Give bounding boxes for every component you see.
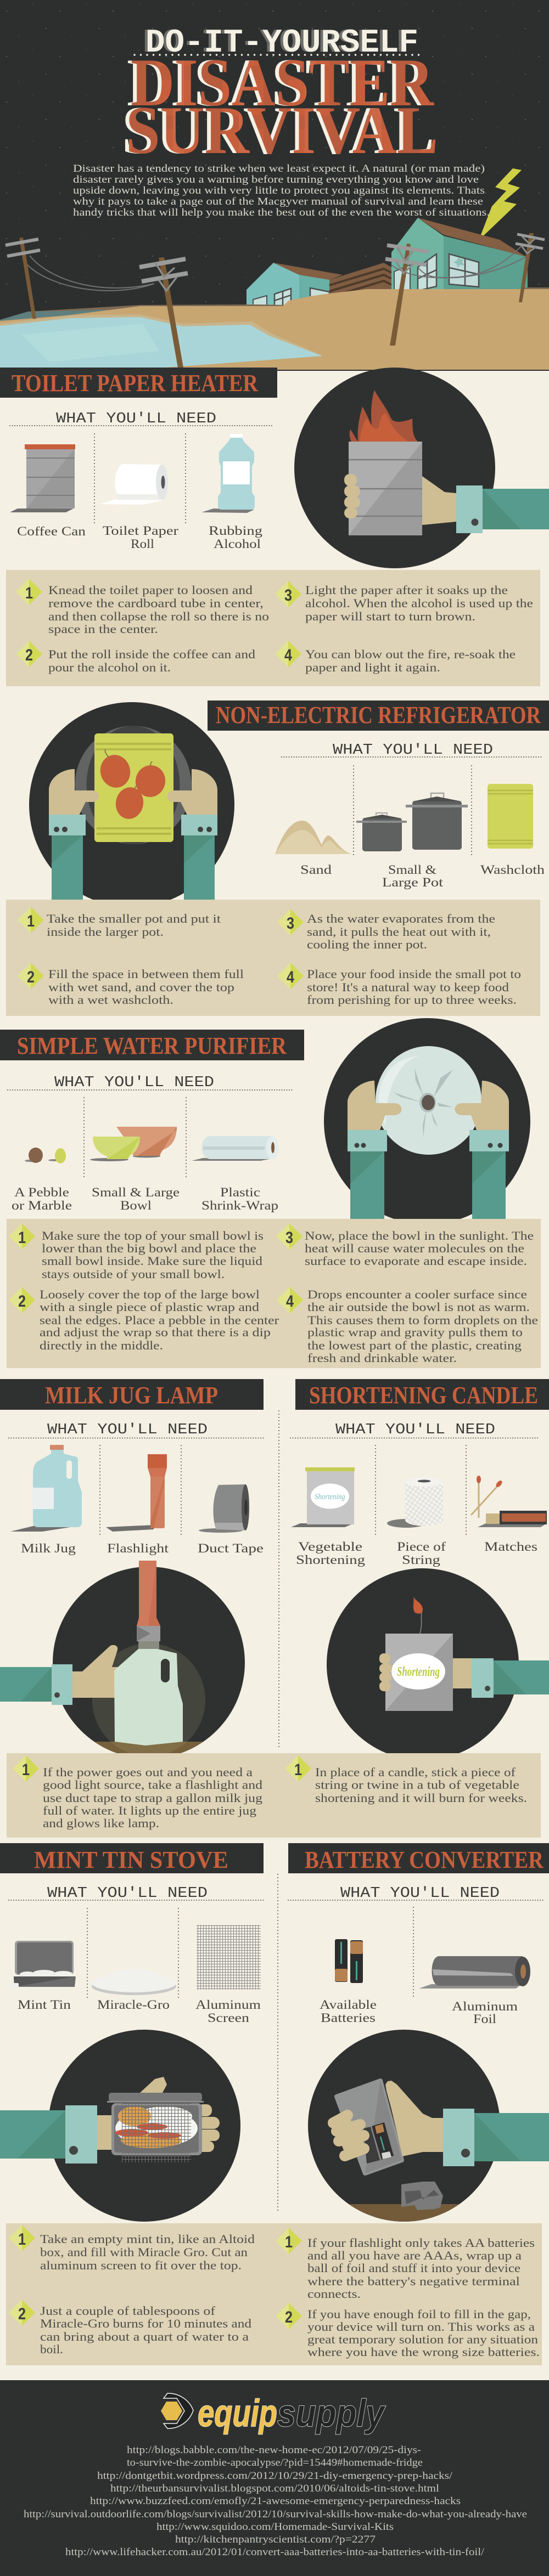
icon: lightning bolt (479, 168, 522, 240)
heading: what you'll need: WHAT YOU'LL NEED (56, 411, 216, 427)
label: rubbing alcohol (209, 524, 263, 551)
step 3: Light the paper after it soaks up the (305, 583, 508, 597)
step 2: directly in the middle. (40, 1338, 163, 1352)
panel: lamp and candle steps (7, 1753, 541, 1838)
step 3: heat will cause water molecules on the (305, 1241, 524, 1255)
step 2: with wet sand, and cover the top (48, 980, 234, 994)
label: washcloth: Washcloth (480, 863, 545, 877)
battery step 1: 1 (285, 2233, 293, 2251)
candle step 1: 1 (294, 1761, 302, 1779)
step 1: stays outside of your small bowl. (42, 1267, 225, 1281)
step 3: alcohol. When the alcohol is used up the (305, 596, 533, 610)
label: piece of string: String (402, 1553, 441, 1567)
step 4: from perishing for up to three weeks. (307, 993, 517, 1007)
title: disaster survival: SURVIVAL (126, 93, 438, 168)
step 4: 4 (284, 646, 292, 664)
source links: to-survive-the-zombie-apocalypse/?pid=15449#homemade-fridge (127, 2457, 423, 2468)
label: miracle-gro: Miracle-Gro (97, 1998, 170, 2012)
step 4: You can blow out the fire, re-soak the (305, 647, 516, 661)
step 1: and then collapse the roll so there is no (48, 609, 269, 623)
step 3 (275, 581, 533, 623)
step 4: the lowest part of the plastic, creating (307, 1338, 522, 1352)
sleeve and cuff (0, 1664, 72, 1705)
battery step 1: ball of foil and stuff it into your device (307, 2261, 520, 2275)
illustration: utility poles and wires (5, 233, 545, 371)
battery step 2 (276, 2303, 540, 2359)
step 2: 2 (27, 968, 35, 986)
stove step 2: boil. (40, 2342, 63, 2356)
icon: pebble and marble (25, 1148, 66, 1163)
step 1: 1 (25, 584, 33, 602)
label: available batteries: Batteries (321, 2011, 376, 2025)
icon: small pot (356, 813, 407, 851)
source links: http://www.buzzfeed.com/emofly/21-awesome-emergency-perparedness-hacks (90, 2495, 461, 2507)
sleeve and cuff (443, 2109, 549, 2166)
icon: flashlight (106, 1454, 167, 1532)
panel: toilet paper heater steps (6, 570, 540, 686)
hand and fingers (333, 2081, 443, 2156)
right hand and sleeve (167, 769, 217, 900)
label: small and large pot (382, 863, 444, 889)
step 3 (277, 909, 495, 951)
step 2: 2 (25, 646, 33, 664)
battery step 2: your device will turn on. This works as a (307, 2320, 535, 2334)
step 3: surface to evaporate and escape inside. (305, 1254, 527, 1268)
illustration: hand holding shortening candle (327, 1568, 549, 1760)
section: shortening candle (290, 1379, 549, 1760)
wrapped bowl with pebble (376, 1046, 481, 1155)
label: aluminum screen (195, 1998, 261, 2025)
icon: small and large bowl (90, 1127, 177, 1161)
sleeve and cuff (472, 1658, 549, 1698)
label: vegetable shortening: Vegetable (298, 1540, 362, 1553)
source links: http://survival.outdoorlife.com/blogs/survivalist/2012/10/survival-skills-how-make-do-what-you-already-have (24, 2509, 527, 2520)
step 4: store! It's a natural way to keep food (307, 980, 509, 994)
shortening tub candle (385, 1634, 453, 1711)
stove step 1: aluminum screen to fit over the top. (40, 2258, 242, 2272)
step 2: with a single piece of plastic wrap and (40, 1300, 259, 1314)
taped flashlight (137, 1561, 160, 1649)
step 4: 4 (286, 1292, 294, 1310)
icon: aluminum screen (197, 1925, 261, 1990)
step 1: Knead the toilet paper to loosen and (48, 583, 253, 597)
lamp step 1 (13, 1755, 262, 1830)
step 2: Put the roll inside the coffee can and (48, 647, 255, 661)
lamp step 1: use duct tape to strap a gallon milk jug (43, 1791, 262, 1805)
icon: aluminum foil roll (419, 1956, 530, 1989)
step 1: inside the larger pot. (47, 925, 164, 939)
illustration: flood water (0, 314, 322, 371)
stove step 2: Just a couple of tablespoons of (40, 2304, 216, 2318)
illustration: large house (391, 218, 528, 291)
intro paragraph: why it pays to take a page out of the Macgyver manual of survival and learn these (73, 196, 483, 207)
title: disaster survival: DISASTER (127, 45, 430, 120)
battery step 1: where the battery's negative terminal (307, 2274, 520, 2288)
label: pebble or marble: or Marble (12, 1199, 72, 1212)
mint tin with lid (107, 2093, 204, 2155)
label: plastic shrink-wrap: Shrink-Wrap (201, 1199, 278, 1212)
step 3: 3 (285, 1229, 293, 1247)
shortening tub candle: Shortening (397, 1665, 440, 1679)
hand fingers (379, 1653, 392, 1691)
step 1: small bowl inside. Make sure the liquid (42, 1254, 262, 1268)
label: aluminum foil: Aluminum (452, 1999, 518, 2013)
icon: sand pile (275, 821, 351, 854)
intro paragraph: upside down, leaving you with very little to protect you against its elements. Thats (73, 185, 485, 196)
hand (72, 1645, 118, 1698)
illustration: hand with glowing jug lamp (0, 1561, 245, 1764)
battery step 1: connects. (307, 2287, 361, 2301)
flame (350, 390, 418, 442)
label: mint tin: Mint Tin (18, 1998, 71, 2012)
logo: equip supply: supply (277, 2392, 386, 2434)
section: simple water purifier (0, 1018, 541, 1368)
icon: piece of string (387, 1478, 443, 1528)
step 4: plastic wrap and gravity pulls them to (307, 1325, 523, 1339)
candle flame and wick (413, 1596, 423, 1634)
stove step 2 (9, 2300, 251, 2356)
miracle-gro fuel (115, 2106, 198, 2148)
step 1 (9, 1223, 264, 1281)
intro paragraph: handy tricks that will help you make the best out of the even the worst of situations. (73, 207, 490, 218)
left hand and sleeve (348, 1081, 402, 1219)
label: plastic shrink-wrap (201, 1185, 278, 1212)
panel: water purifier steps (7, 1219, 541, 1368)
step 1: remove the cardboard tube in center, (48, 596, 264, 610)
label: milk jug: Milk Jug (21, 1541, 76, 1555)
right hand and sleeve (455, 1081, 509, 1219)
heading: mint tin stove: MINT TIN STOVE (34, 1846, 228, 1873)
label: vegetable shortening: Shortening (296, 1553, 366, 1567)
step 1: space in the center. (48, 622, 158, 636)
step 2: with a wet washcloth. (48, 993, 173, 1007)
label: piece of string (397, 1540, 446, 1567)
panel: stove and battery steps (6, 2223, 542, 2365)
battery step 2: great temporary solution for any situation (307, 2332, 538, 2346)
illustration: hands holding covered pot (29, 702, 234, 907)
hand (97, 2077, 220, 2152)
stove step 1: box, and fill with Miracle Gro. Cut an (40, 2245, 248, 2259)
lamp step 1: If the power goes out and you need a (43, 1765, 253, 1779)
icon: rubbing alcohol bottle (201, 434, 255, 513)
step 4: fresh and drinkable water. (307, 1351, 457, 1365)
open flashlight (337, 2081, 402, 2173)
step 4: Drops encounter a cooler surface since (307, 1287, 527, 1301)
section: non-electric refrigerator (6, 701, 549, 1016)
battery step 2: 2 (285, 2308, 293, 2326)
wet washcloth with apples (94, 733, 173, 842)
illustration: hand holding flashlight with foil (308, 2030, 549, 2226)
label: aluminum screen: Screen (208, 2011, 250, 2025)
title: disaster survival (122, 45, 438, 168)
step 4: Place your food inside the small pot to (307, 967, 521, 981)
icon: miracle-gro pile (92, 1969, 176, 1995)
source links: http://www.squidoo.com/Homemade-Survival-Kits (156, 2521, 394, 2533)
heading: toilet paper heater: TOILET PAPER HEATER (12, 370, 259, 397)
source links: http://kitchenpantryscientist.com/?p=2277 (175, 2534, 376, 2545)
step 1 (18, 907, 221, 939)
heading: what you'll need: WHAT YOU'LL NEED (47, 1885, 208, 1902)
icon: large pot (406, 793, 468, 850)
label: pebble or marble (12, 1185, 72, 1212)
intro paragraph: disaster rarely gives you a warning before turning everything you know and love (73, 174, 479, 185)
source links (24, 2444, 527, 2558)
battery step 2: where you have the wrong size batteries. (307, 2345, 540, 2359)
icon: vegetable shortening tub (291, 1467, 355, 1527)
label: small and large pot: Small & (388, 863, 436, 877)
label: small and large bowl: Bowl (120, 1199, 152, 1212)
heading: milk jug lamp: MILK JUG LAMP (45, 1382, 218, 1409)
step 1: Make sure the top of your small bowl is (42, 1229, 264, 1242)
lamp step 1: full of water. It lights up the entire jug (43, 1804, 256, 1817)
step 4: 4 (287, 968, 294, 986)
lamp step 1: good light source, take a flashlight and (43, 1778, 262, 1792)
step 2 (9, 1287, 279, 1352)
label: small and large bowl: Small & Large (92, 1185, 180, 1199)
label: vegetable shortening (296, 1540, 366, 1567)
illustration: hand holding burning can (294, 368, 549, 568)
illustration: hand holding mint tin stove (0, 2030, 240, 2222)
icon: mint tin (7, 1941, 76, 1988)
intro paragraph: Disaster has a tendency to strike when we least expect it. A natural (or man made) (73, 163, 485, 174)
section: battery converter (288, 1843, 549, 2226)
icon: milk jug (10, 1445, 82, 1532)
candle step 1: In place of a candle, stick a piece of (315, 1765, 516, 1779)
step 4 (275, 641, 516, 674)
battery step 2: If you have enough foil to fill in the gap, (307, 2307, 531, 2321)
title: disaster survival: DISASTER (131, 45, 434, 120)
step 2: Loosely cover the top of the large bowl (40, 1287, 260, 1301)
label: small and large bowl (92, 1185, 180, 1212)
step 2 (18, 963, 244, 1007)
illustration: ground and horizon (0, 287, 549, 370)
heading: what you'll need: WHAT YOU'LL NEED (340, 1885, 500, 1902)
stove step 2: can bring about a quart of water to a (40, 2330, 249, 2343)
icon: duct tape (199, 1484, 249, 1533)
sleeve and cuff (456, 485, 549, 533)
icon: available batteries (335, 1939, 363, 1983)
step 3: As the water evaporates from the (307, 912, 495, 925)
label: flashlight: Flashlight (107, 1541, 169, 1555)
section: toilet paper heater (0, 368, 549, 686)
label: sand: Sand (300, 863, 332, 877)
lamp step 1: and glows like lamp. (43, 1816, 159, 1830)
label: small and large pot: Large Pot (382, 875, 444, 889)
icon: washcloth (488, 784, 533, 849)
label: plastic shrink-wrap: Plastic (220, 1185, 260, 1199)
step 1: lower than the big bowl and place the (42, 1241, 256, 1255)
icon: toilet paper roll (100, 464, 168, 505)
panel: refrigerator steps (6, 900, 540, 1016)
logo: equip supply (161, 2392, 386, 2434)
heading: what you'll need: WHAT YOU'LL NEED (47, 1422, 208, 1438)
label: rubbing alcohol: Rubbing (209, 524, 263, 538)
step 2: pour the alcohol on it. (48, 660, 171, 674)
foil ball (401, 2182, 443, 2210)
label: coffee can: Coffee Can (17, 524, 86, 538)
candle step 1: shortening and it will burn for weeks. (315, 1791, 527, 1805)
source links: http://dontgetbit.wordpress.com/2012/10/29/21-diy-emergency-prep-hacks/ (97, 2470, 453, 2482)
step 3 (276, 1223, 534, 1268)
step 3: 3 (287, 914, 294, 933)
step 1: 1 (27, 912, 35, 930)
title: do-it-yourself: DO-IT-YOURSELF (143, 25, 416, 62)
source links: http://www.lifehacker.com.au/2012/01/convert-aaa-batteries-into-aa-batteries-with-tin-foil/ (65, 2546, 485, 2558)
battery step 1: and all you have are AAAs, wrap up a (307, 2249, 522, 2262)
glowing milk jug (114, 1649, 183, 1745)
battery step 1 (276, 2228, 535, 2301)
step 3: cooling the inner pot. (307, 937, 427, 951)
heading: milk jug lamp (0, 1379, 264, 1410)
label: aluminum screen: Aluminum (195, 1998, 261, 2012)
footer panel (0, 2380, 549, 2576)
step 3: paper will start to turn brown. (305, 609, 475, 623)
label: toilet paper roll: Toilet Paper (103, 524, 178, 538)
label: rubbing alcohol: Alcohol (214, 537, 261, 551)
step 2: and adjust the wrap so that there is a dip (40, 1325, 271, 1339)
step 2: seal the edges. Place a pebble in the center (40, 1313, 279, 1327)
label: aluminum foil (452, 1999, 518, 2026)
step 1: 1 (18, 1229, 26, 1247)
illustration: hands holding wrapped bowl (324, 1018, 530, 1224)
label: toilet paper roll: Roll (131, 537, 154, 551)
label: aluminum foil: Foil (473, 2012, 496, 2026)
sleeve and cuff (0, 2105, 97, 2163)
step 4 (277, 1287, 538, 1365)
stove step 2: Miracle-Gro burns for 10 minutes and (40, 2317, 251, 2330)
illustration: small house (247, 263, 391, 307)
stove step 1 (9, 2225, 255, 2272)
stove step 2: 2 (18, 2305, 26, 2323)
icon: vegetable shortening tub: Shortening (315, 1493, 345, 1501)
source links: http://theurbansurvivalist.blogspot.com/2010/06/altoids-tin-stove.html (110, 2483, 439, 2494)
heading: what you'll need: WHAT YOU'LL NEED (335, 1422, 495, 1438)
step 3: Now, place the bowl in the sunlight. The (305, 1229, 534, 1242)
step 2 (16, 641, 255, 674)
icon: coffee can (10, 444, 75, 512)
candle step 1: string or twine in a tub of vegetable (315, 1778, 519, 1792)
hero panel (0, 0, 549, 371)
step 4: paper and light it again. (305, 660, 440, 674)
heading: what you'll need: WHAT YOU'LL NEED (333, 742, 493, 759)
step 4 (277, 963, 521, 1007)
step 4: the air outside the bowl is not as warm. (307, 1300, 530, 1314)
heading: simple water purifier: SIMPLE WATER PURIFIER (17, 1032, 287, 1059)
source links: http://blogs.babble.com/the-new-home-ec/2012/07/09/25-diys- (127, 2444, 421, 2456)
label: matches: Matches (484, 1540, 537, 1553)
section: mint tin stove (0, 1843, 264, 2222)
mesh screen (122, 2102, 191, 2162)
step 1 (16, 579, 269, 636)
step 4: This causes them to form droplets on the (307, 1313, 538, 1327)
heading: mint tin stove (0, 1843, 264, 1873)
stove step 1: Take an empty mint tin, like an Altoid (40, 2232, 255, 2246)
icon: plastic shrink-wrap (192, 1136, 278, 1161)
title: do-it-yourself: DO-IT-YOURSELF (145, 25, 418, 62)
logo: equip supply: equip (198, 2392, 277, 2434)
step 1: Take the smaller pot and put it (47, 912, 221, 925)
step 2: Fill the space in between them full (48, 967, 244, 981)
section: milk jug lamp (0, 1379, 264, 1764)
step 2: 2 (18, 1292, 26, 1310)
step 3: 3 (284, 586, 292, 605)
label: available batteries: Available (320, 1998, 377, 2012)
title: disaster survival: SURVIVAL (122, 93, 434, 168)
icon: matches (471, 1476, 547, 1527)
hand fingers (344, 474, 360, 518)
left hand and sleeve (49, 769, 99, 900)
battery step 1: If your flashlight only takes AA batteries (307, 2236, 535, 2250)
label: toilet paper roll (103, 524, 178, 551)
intro paragraph (73, 163, 490, 218)
label: pebble or marble: A Pebble (14, 1185, 69, 1199)
candle step 1 (285, 1755, 527, 1805)
label: duct tape: Duct Tape (198, 1541, 264, 1555)
label: available batteries (320, 1998, 377, 2025)
stove step 1: 1 (18, 2230, 26, 2249)
burning can (349, 442, 422, 535)
lamp step 1: 1 (22, 1761, 30, 1779)
heading: what you'll need: WHAT YOU'LL NEED (54, 1075, 214, 1091)
step 3: sand, it pulls the heat out with it, (307, 925, 491, 939)
label: piece of string: Piece of (397, 1540, 446, 1553)
